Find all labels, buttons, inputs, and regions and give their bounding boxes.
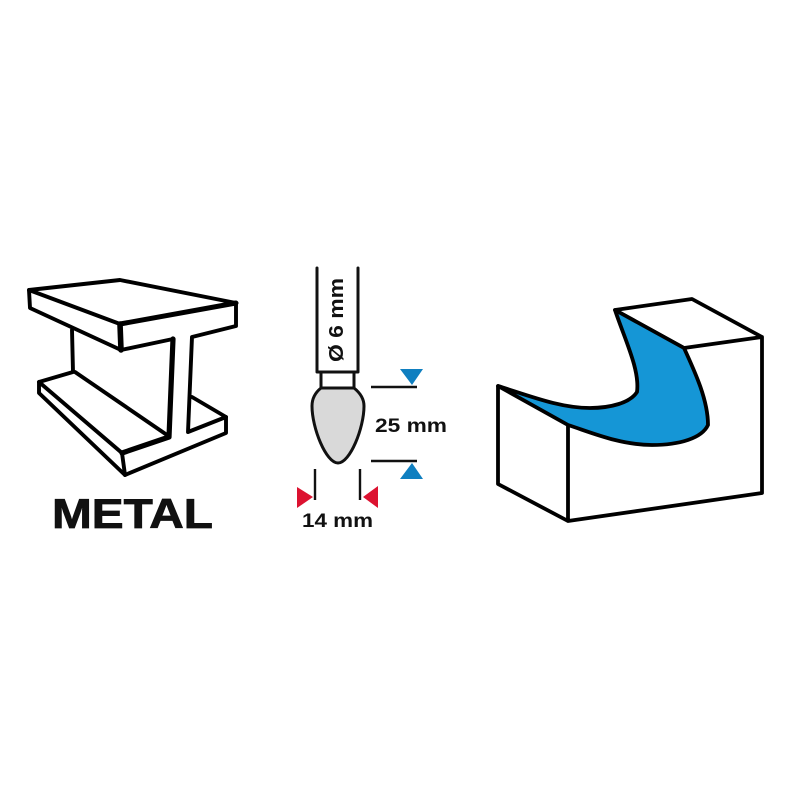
label: head width: 14 mm: [302, 511, 373, 532]
icon: blue arrow bottom: [400, 463, 423, 479]
icon: red arrow left: [297, 487, 313, 508]
dimension: head length lines: [371, 387, 417, 461]
panel: metal beam with label: [29, 280, 236, 537]
icon: block outline: [498, 299, 762, 521]
label: shank diameter: Ø 6 mm: [325, 278, 348, 362]
icon: blue cut surface: [498, 310, 708, 445]
icon: blue arrow top: [400, 369, 423, 385]
icon: grinding head: [312, 388, 364, 463]
icon: shank: [317, 268, 358, 372]
panel: workpiece with blue concave cut: [498, 299, 762, 521]
panel: bit dimensions: [297, 268, 447, 532]
label: head length: 25 mm: [375, 416, 447, 437]
label: METAL: METAL: [52, 490, 213, 537]
icon: I-beam: [29, 280, 236, 475]
icon: neck: [321, 373, 354, 388]
icon: red arrow right: [363, 486, 378, 508]
dimension: head width lines: [315, 469, 360, 500]
